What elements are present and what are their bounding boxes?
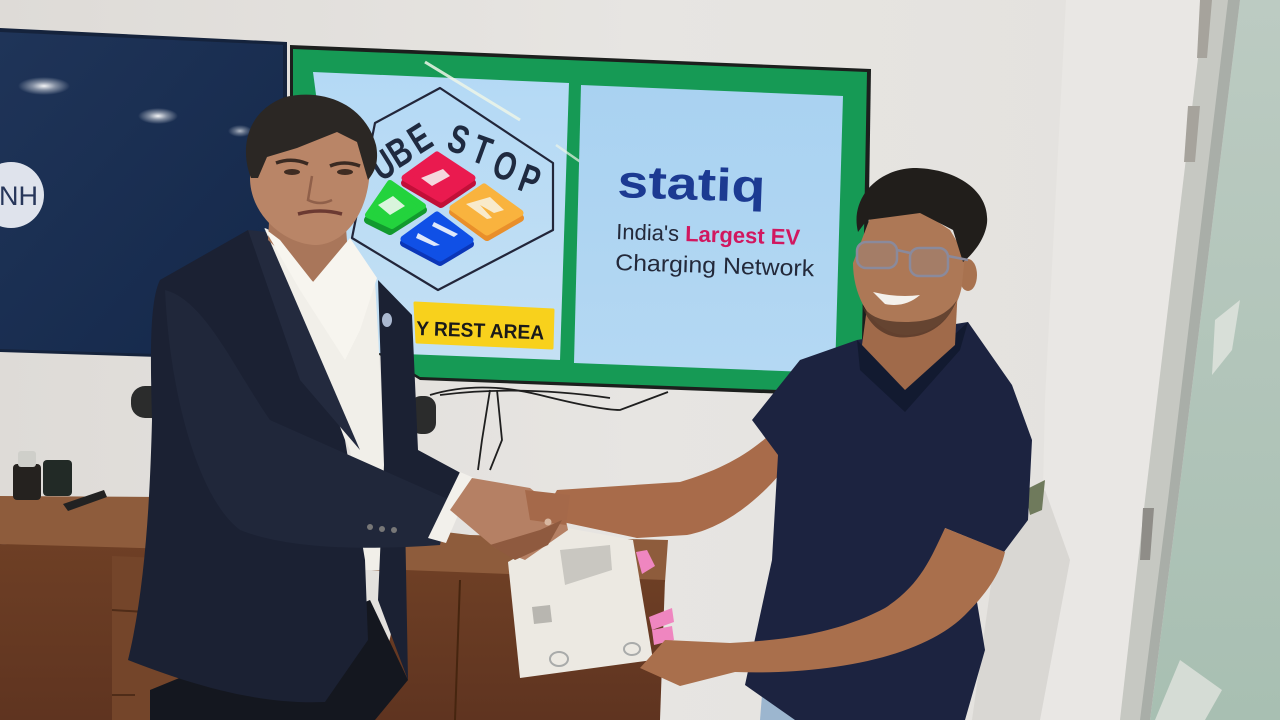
- beard: [862, 300, 957, 338]
- office chair behind: [131, 386, 436, 434]
- left man: suit: [128, 95, 474, 720]
- wooden cabinet: [0, 451, 668, 720]
- shirt: [265, 228, 385, 570]
- jeans: [760, 695, 800, 720]
- handshake: [450, 478, 570, 560]
- NH logo circle: NH: [0, 181, 38, 211]
- document held between men: [508, 528, 674, 678]
- tagline: India's Largest EV: [616, 219, 801, 250]
- forearm and hand: [640, 528, 1005, 686]
- icon: red tile: [405, 155, 472, 204]
- cables under TV: [430, 388, 668, 470]
- cube stop heading: U: [362, 141, 404, 190]
- highway rest area banner: Y REST AREA: [416, 318, 545, 344]
- collar: [264, 228, 377, 360]
- right man: polo: [540, 168, 1032, 720]
- upper arm to handshake: [540, 425, 795, 538]
- hair: [857, 168, 987, 262]
- face: [276, 160, 360, 166]
- tagline: Charging Network: [615, 249, 815, 281]
- head: [250, 120, 369, 245]
- hair: [246, 95, 377, 180]
- cube stop heading: S: [442, 116, 475, 164]
- left TV screen: [0, 28, 287, 361]
- neck: [268, 205, 350, 290]
- cube stop heading: E: [400, 115, 440, 163]
- icon: green tile: [368, 183, 423, 231]
- jacket: [128, 230, 368, 702]
- cube stop heading: T: [466, 127, 498, 175]
- smile: [873, 292, 920, 305]
- jacket arm: [165, 290, 450, 548]
- desk items: [13, 451, 107, 511]
- NH logo circle: [0, 162, 44, 228]
- sleeve buttons: [367, 524, 397, 533]
- head: [853, 210, 965, 335]
- glass door at right: [1120, 0, 1280, 720]
- ear: [959, 259, 977, 291]
- cube stop heading: P: [513, 156, 546, 204]
- highway rest area banner: [415, 303, 553, 348]
- cuff: [428, 472, 474, 543]
- sticky tabs: [636, 550, 674, 645]
- right slide: Statiq: [574, 85, 843, 373]
- glasses: [857, 242, 968, 276]
- cube stop heading: B: [379, 128, 421, 177]
- trousers: [150, 600, 408, 720]
- polo: [745, 322, 1032, 720]
- icon: blue tile: [404, 215, 470, 262]
- tagline: [615, 219, 815, 281]
- left slide: Cube Stop: [313, 62, 582, 360]
- icon: orange tile: [453, 187, 520, 237]
- lapel pin: [382, 313, 392, 327]
- cube stop heading: O: [487, 142, 523, 191]
- neck: [862, 285, 958, 390]
- statiq logo: statiq: [617, 155, 766, 212]
- cube stop heading: [362, 115, 546, 204]
- centre TV: green frame: [290, 45, 871, 397]
